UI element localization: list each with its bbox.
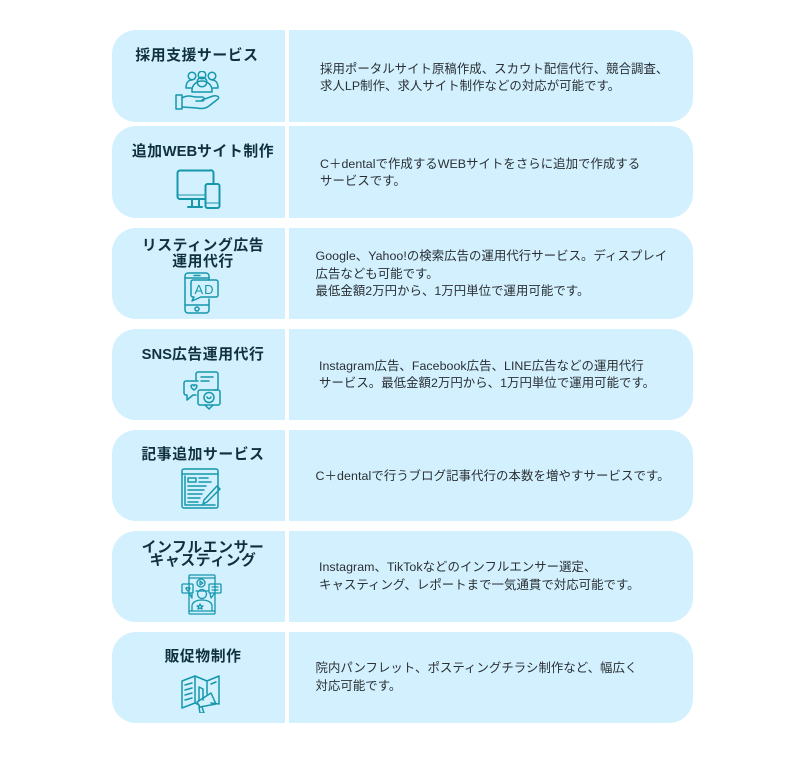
icon: phone with AD bubble xyxy=(184,272,219,314)
heading: recruitment support: 採用支援サービス xyxy=(135,48,259,64)
panel: listing ads xyxy=(112,228,693,319)
description: C＋dentalで行うブログ記事代行の本数を増やすサービスです。 xyxy=(316,468,670,482)
description: 広告なども可能です。 xyxy=(316,266,439,280)
description: 求人LP制作、求人サイト制作などの対応が可能です。 xyxy=(320,78,620,92)
icon: leaflet with megaphone xyxy=(181,675,220,713)
panel: influencer casting xyxy=(112,531,693,622)
heading: additional website: 追加WEBサイト制作 xyxy=(132,144,274,160)
description xyxy=(316,660,637,692)
panel: article addition xyxy=(112,430,693,521)
icon: phone with AD bubble: AD xyxy=(194,282,215,297)
panel: promotional materials xyxy=(112,632,693,723)
icon: document with pen xyxy=(181,468,221,509)
description xyxy=(319,358,655,390)
heading: article addition: 記事追加サービス xyxy=(141,447,265,463)
panel: recruitment support xyxy=(112,30,693,122)
description xyxy=(316,249,667,298)
panel: additional website xyxy=(112,126,693,218)
heading: SNS ads: SNS広告運用代行 xyxy=(142,347,264,363)
icon: influencer on screen xyxy=(181,574,222,615)
description xyxy=(319,560,640,592)
description: Instagram、TikTokなどのインフルエンサー選定、 xyxy=(319,560,596,574)
icon: hand holding people xyxy=(175,71,220,110)
panel: SNS ads xyxy=(112,329,693,420)
heading: listing ads xyxy=(142,237,264,270)
description: Google、Yahoo!の検索広告の運用代行サービス。ディスプレイ xyxy=(316,249,667,263)
heading: influencer casting xyxy=(142,540,264,569)
description: C＋dentalで作成するWEBサイトをさらに追加で作成する xyxy=(320,156,640,170)
description xyxy=(320,62,668,92)
description: 院内パンフレット、ポスティングチラシ制作など、幅広く xyxy=(316,660,637,674)
icon: chat bubbles xyxy=(183,371,221,410)
description: サービスです。 xyxy=(320,174,406,188)
description: 採用ポータルサイト原稿作成、スカウト配信代行、競合調査、 xyxy=(320,62,668,76)
description: 対応可能です。 xyxy=(316,678,401,692)
description: 最低金額2万円から、1万円単位で運用可能です。 xyxy=(316,284,589,298)
description xyxy=(320,156,640,188)
heading: listing ads: 運用代行 xyxy=(172,254,234,270)
heading: influencer casting: キャスティング xyxy=(150,553,256,569)
heading: listing ads: リスティング広告 xyxy=(142,238,264,254)
heading: influencer casting: インフルエンサー xyxy=(142,540,264,556)
icon: monitor and phone xyxy=(176,169,220,209)
description: サービス。最低金額2万円から、1万円単位で運用可能です。 xyxy=(319,376,655,390)
description: キャスティング、レポートまで一気通貫で対応可能です。 xyxy=(319,578,640,592)
description: Instagram広告、Facebook広告、LINE広告などの運用代行 xyxy=(319,358,644,372)
heading: promotional materials: 販促物制作 xyxy=(164,649,242,665)
